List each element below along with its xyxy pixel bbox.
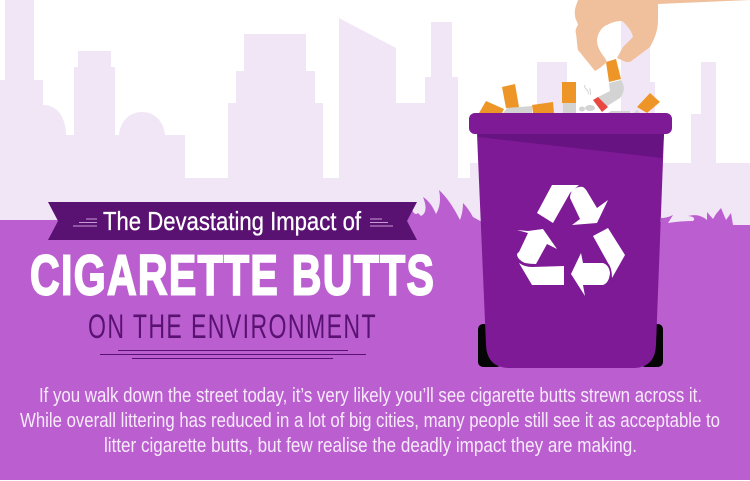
ribbon accent lines: [73, 219, 393, 226]
bin wheels: [478, 324, 663, 367]
recycling symbol: [517, 185, 625, 296]
subheading: ON THE ENVIRONMENT: [88, 309, 376, 346]
bin rim shadow: [478, 134, 664, 158]
city skyline: [0, 0, 750, 230]
bin body: [477, 134, 664, 368]
subheading underlines: [100, 350, 366, 358]
intro paragraph: litter cigarette butts, but few realise the deadly impact they are making.: [104, 435, 637, 457]
main heading: CIGARETTE BUTTS: [30, 243, 434, 307]
title ribbon: [48, 202, 417, 240]
recycling bin: [469, 113, 672, 368]
falling cigarette butt: [579, 59, 624, 112]
ribbon heading text: The Devastating Impact of: [103, 206, 362, 236]
cigarette butts in bin: [479, 82, 660, 113]
hand: [575, 0, 750, 71]
intro paragraph: [20, 385, 720, 457]
purple ground with grass: [0, 190, 750, 480]
bin rim: [469, 113, 672, 134]
